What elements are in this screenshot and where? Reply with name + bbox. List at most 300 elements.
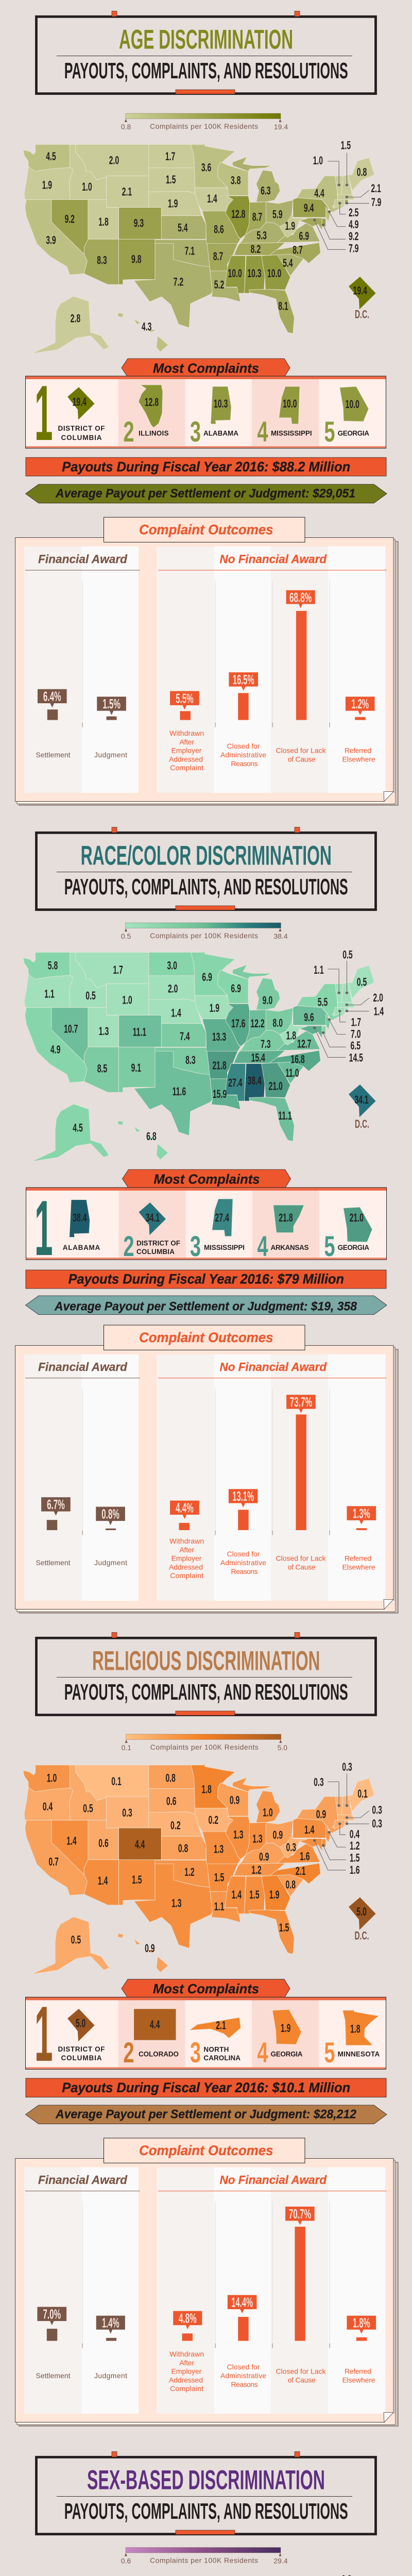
map: race complaints per state: 8.0 xyxy=(273,1016,283,1029)
legend: religious complaints scale: 5.0 xyxy=(278,1743,287,1752)
rank 1: alabama: ALABAMA xyxy=(63,1244,100,1251)
bar: lack of cause 73.7%: 73.7% xyxy=(290,1395,312,1410)
map: race complaints per state: 1.9 xyxy=(210,1002,219,1014)
bar: settlement 7.0% xyxy=(37,2307,66,2341)
panel: race complaint outcomes: Employer xyxy=(171,1554,202,1562)
map: age complaints per state: 8.7 xyxy=(252,210,262,223)
map: religious complaints per state: 0.9 xyxy=(230,1793,239,1807)
panel: religious complaint outcomes: Complaint xyxy=(170,2384,203,2393)
rank 2: colorado: COLORADO xyxy=(139,2050,179,2058)
panel: top five states for religious complaints xyxy=(26,1990,386,2078)
rank 1: district of columbia xyxy=(35,1990,105,2078)
map: age complaints per state: 5.3 xyxy=(256,229,267,242)
map: age complaints per state: 10.3 xyxy=(247,267,262,280)
map: race complaints per state: 12.7 xyxy=(297,1037,311,1050)
rank 5: georgia: GEORGIA xyxy=(338,1244,369,1251)
bar: judgment 1.5% xyxy=(97,697,126,720)
map: religious complaints per state: 4.4 xyxy=(135,1838,145,1851)
panel: age complaint outcomes: Employer xyxy=(171,746,202,754)
panel: race complaint outcomes: Settlement xyxy=(36,1558,71,1567)
bar: referred 1.8%: 1.8% xyxy=(353,2316,370,2331)
payout banner: religion: Payouts During Fiscal Year 2016: $10.1 Million xyxy=(62,2080,350,2095)
bar: administrative 14.4%: 14.4% xyxy=(231,2295,253,2310)
panel: race complaint outcomes: Judgment xyxy=(94,1558,127,1567)
rank 2: illinois xyxy=(123,385,169,448)
panel: race complaint outcomes: After xyxy=(179,1546,194,1554)
panel: religious complaint outcomes: Administrative xyxy=(220,2371,266,2380)
map: age complaints per state: 2.1 xyxy=(371,182,381,195)
rank 2: colorado: 4.4 xyxy=(150,2018,160,2031)
legend: sex complaints scale: Complaints per 100K Residents xyxy=(150,2556,258,2565)
rank 5: minnesota: MINNESOTA xyxy=(338,2050,380,2058)
panel: age complaint outcomes: Settlement xyxy=(36,751,71,759)
map: age complaints per state: 4.5 xyxy=(46,150,56,163)
map: religious complaints per state: 1.3 xyxy=(252,1832,263,1845)
map: race complaints per state: 21.0 xyxy=(269,1079,283,1092)
map: age complaints per state: 7.9 xyxy=(371,196,381,209)
legend: religious complaints scale: 0.1 xyxy=(122,1743,131,1752)
map: race complaints per state: 0.5 xyxy=(357,975,367,988)
map: race complaints per state: 13.3 xyxy=(212,1030,226,1043)
rank 4: georgia xyxy=(257,2009,303,2069)
panel: age complaint outcomes: Closed for Lack xyxy=(276,746,327,754)
panel: race complaint outcomes xyxy=(15,1325,398,1613)
map: religious complaints per state: 1.0 xyxy=(47,1771,57,1784)
map: age complaints per state: 1.8 xyxy=(98,215,109,228)
heading ribbon: most complaints xyxy=(122,359,290,377)
rank 2: district of columbia: DISTRICT OF xyxy=(136,1240,180,1247)
panel: race complaint outcomes: Closed for Lack xyxy=(276,1554,327,1562)
map: age complaints per state: 4.9 xyxy=(349,217,358,231)
map: race complaints per state: 11.0 xyxy=(285,1066,299,1079)
map: race complaints per state: 0.5 xyxy=(85,989,96,1002)
bar: referred 1.8% xyxy=(347,2316,376,2341)
rank 3: north carolina: 2.1 xyxy=(216,2019,226,2031)
rank 4: arkansas: ARKANSAS xyxy=(271,1244,309,1251)
map: religious complaints per state: 0.4 xyxy=(43,1800,53,1813)
bar: lack of cause 73.7% xyxy=(286,1395,316,1530)
panel: age complaint outcomes: After xyxy=(179,738,194,746)
map: age complaints per state: 1.0 xyxy=(82,180,92,193)
panel: religious complaint outcomes: Judgment xyxy=(94,2371,127,2380)
map: religious complaints per state: 1.6 xyxy=(300,1850,310,1862)
rank 1: district of columbia: COLUMBIA xyxy=(61,2054,102,2062)
map: race complaints per state: 1.0 xyxy=(122,993,132,1006)
panel: age complaint outcomes: Administrative xyxy=(220,751,266,759)
rank 2: illinois: 12.8 xyxy=(145,396,159,409)
map: religious complaints per state: 1.4 xyxy=(304,1823,315,1836)
map: age complaints per state: 9.4 xyxy=(304,201,314,214)
rank 3: north carolina: CAROLINA xyxy=(203,2054,241,2062)
map: religious complaints per state: 1.1 xyxy=(214,1900,224,1913)
map: religious complaints per state: 1.2 xyxy=(350,1839,360,1852)
panel: religious complaint outcomes: Elsewhere xyxy=(342,2376,375,2384)
map: religious complaints per state: 1.4 xyxy=(98,1874,108,1887)
map: race complaints per state: 15.4 xyxy=(251,1051,265,1064)
rank 3: mississippi: 3 xyxy=(190,1231,201,1263)
rank 3: alabama: ALABAMA xyxy=(203,430,238,437)
rank 2: colorado xyxy=(123,2009,179,2069)
rank 3: north carolina: 3 xyxy=(190,2037,201,2069)
rank 2: district of columbia: 2 xyxy=(123,1231,134,1263)
map: race complaints per state: 21.8 xyxy=(212,1059,227,1072)
map: religious complaints per state: 2.1 xyxy=(296,1865,305,1877)
legend: race complaints scale: 0.5 xyxy=(121,932,131,940)
average payout ribbon: race xyxy=(26,1296,387,1315)
map: religious complaints per state: D.C. xyxy=(355,1929,369,1942)
map: age complaints per state: 1.4 xyxy=(207,192,217,205)
heading ribbon: most complaints xyxy=(122,1979,290,1998)
map: race complaints per state: 7.0 xyxy=(351,1027,361,1040)
map: race complaints per state: 10.7 xyxy=(64,1022,78,1035)
map: race complaints per state: 9.0 xyxy=(263,994,272,1007)
panel: religious complaint outcomes: Addressed xyxy=(169,2376,203,2384)
rank 4: georgia: GEORGIA xyxy=(271,2050,303,2058)
bar: judgment 1.4% xyxy=(96,2316,125,2341)
map: religious complaints per state: 1.6 xyxy=(350,1863,360,1876)
map: race complaints per state: 6.9 xyxy=(231,982,241,995)
map: religious complaints per state: 1.2 xyxy=(184,1866,195,1878)
payout banner: race: Payouts During Fiscal Year 2016: $79 Million xyxy=(68,1272,344,1287)
map: age complaints per state: 5.2 xyxy=(214,278,224,291)
map: race complaints per state: 38.4 xyxy=(247,1074,262,1087)
bar: settlement 6.4% xyxy=(38,689,67,720)
payout banner: race xyxy=(26,1270,386,1289)
bar: lack of cause 70.7%: 70.7% xyxy=(289,2207,311,2222)
map: sex complaints per state xyxy=(23,2572,382,2576)
panel: race complaint outcomes: Referred xyxy=(345,1554,371,1562)
map: age complaints per state: 9.8 xyxy=(131,252,142,265)
map: religious complaints per state: 1.4 xyxy=(232,1888,242,1901)
map: religious complaints per state: 0.1 xyxy=(111,1775,122,1788)
map: race complaints per state: 0.5 xyxy=(342,948,353,961)
map: age complaints per state: 1.9 xyxy=(285,219,295,232)
map: age complaints per state: 6.3 xyxy=(261,184,271,197)
panel: race complaint outcomes: of Cause xyxy=(288,1563,316,1571)
map: race complaints per state: 1.3 xyxy=(99,1025,109,1038)
panel: age complaint outcomes: of Cause xyxy=(288,755,316,764)
panel: age complaint outcomes: No Financial Award xyxy=(220,552,327,566)
panel: race complaint outcomes: Complaint xyxy=(170,1571,203,1580)
map: race complaints per state: 17.6 xyxy=(231,1017,245,1030)
panel: religious complaint outcomes: No Financial Award xyxy=(220,2173,327,2187)
bar: administrative 14.4% xyxy=(228,2295,256,2341)
map: race complaints per state: 12.2 xyxy=(250,1017,265,1030)
map: religious complaints per state: 0.2 xyxy=(170,1819,181,1832)
rank 2: colorado: 2 xyxy=(123,2037,134,2069)
map: age complaints per state: 7.9 xyxy=(349,242,358,255)
panel: race complaint outcomes: Reasons xyxy=(231,1567,258,1575)
map: race complaints per state: 11.6 xyxy=(173,1085,186,1098)
map: age complaints per state: 8.2 xyxy=(251,243,261,256)
map: age complaints per state: 4.4 xyxy=(314,187,324,199)
rank 5: georgia: 21.0 xyxy=(350,1211,364,1224)
map: religious complaints per state: 0.9 xyxy=(316,1808,326,1821)
bar: withdrawn 5.5%: 5.5% xyxy=(176,691,194,706)
map: religious complaints per state: 0.3 xyxy=(122,1806,132,1819)
rank 4: mississippi: 4 xyxy=(257,416,268,448)
map: age complaints per state: 8.7 xyxy=(293,243,303,256)
map: age complaints per state: 5.4 xyxy=(178,221,188,234)
rank 1: alabama: 38.4 xyxy=(73,1211,87,1224)
map: religious complaints per state: 0.3 xyxy=(286,1841,296,1854)
map: religious complaints per state xyxy=(23,1760,382,1974)
map: age complaints per state xyxy=(23,139,381,354)
map: religious complaints per state: 1.5 xyxy=(249,1888,260,1901)
map: age complaints per state: 8.1 xyxy=(278,299,288,313)
panel: race complaint outcomes: Addressed xyxy=(169,1563,203,1571)
map: religious complaints per state: 0.5 xyxy=(83,1802,93,1815)
bar: settlement 6.7% xyxy=(41,1497,71,1530)
map: religious complaints per state: 1.0 xyxy=(263,1806,273,1819)
legend: religious complaints scale xyxy=(122,1734,287,1752)
bar: withdrawn 4.4% xyxy=(170,1500,199,1530)
legend: race complaints scale: Complaints per 100K Residents xyxy=(150,931,258,940)
map: age complaints per state: 7.2 xyxy=(174,275,183,288)
legend: religious complaints scale: Complaints per 100K Residents xyxy=(150,1743,259,1751)
map: religious complaints per state: 0.3 xyxy=(372,1817,382,1830)
panel: religious complaint outcomes xyxy=(15,2138,398,2426)
rank 4: georgia: 4 xyxy=(257,2037,268,2069)
rank 5: georgia xyxy=(324,1207,372,1263)
map: religious complaints per state: 0.3 xyxy=(314,1775,324,1788)
rank 1: district of columbia: 5.0 xyxy=(76,2016,85,2029)
title: age discrimination xyxy=(36,11,376,94)
rank 4: georgia: 1.9 xyxy=(281,2022,290,2035)
rank 2: district of columbia: COLUMBIA xyxy=(136,1248,175,1256)
title: race/color discrimination xyxy=(36,827,376,910)
bar: judgment 0.8%: 0.8% xyxy=(101,1506,119,1521)
map: race complaints per state: 9.6 xyxy=(304,1011,314,1024)
map: race complaints per state: 4.9 xyxy=(50,1043,60,1056)
bars: age outcome percentages xyxy=(38,590,375,720)
panel: religious complaint outcomes: Financial Award xyxy=(38,2173,128,2187)
map: age complaints per state: 1.0 xyxy=(313,154,323,167)
map: age complaints per state: 2.8 xyxy=(71,312,80,325)
map: age complaints per state: 2.5 xyxy=(349,206,358,219)
bar: referred 1.2%: 1.2% xyxy=(351,697,369,711)
panel: age complaint outcomes: Reasons xyxy=(231,759,258,768)
bar: withdrawn 5.5% xyxy=(170,691,199,720)
panel: age complaint outcomes: Financial Award xyxy=(38,552,128,566)
map: race complaints per state: 14.5 xyxy=(349,1051,363,1064)
panel: race complaint outcomes: Withdrawn xyxy=(169,1537,204,1545)
map: religious complaints per state: 1.5 xyxy=(132,1873,142,1886)
map: age complaints per state: 9.2 xyxy=(64,212,75,225)
panel: age complaint outcomes: Withdrawn xyxy=(169,729,204,737)
map: religious complaints per state: 1.4 xyxy=(66,1834,77,1848)
bar: judgment 0.8% xyxy=(96,1506,125,1530)
panel: race complaint outcomes: Administrative xyxy=(220,1558,266,1567)
map: race complaints per state: 8.5 xyxy=(97,1062,107,1075)
map: religious complaints per state: 0.5 xyxy=(71,1933,81,1946)
panel: religious complaint outcomes: Referred xyxy=(345,2367,371,2375)
map: age complaints per state: 9.3 xyxy=(134,216,144,229)
map: religious complaints per state: 0.9 xyxy=(145,1941,155,1955)
bars: religious outcome percentages xyxy=(37,2207,376,2341)
map: race complaints per state: 9.1 xyxy=(131,1061,141,1074)
map: religious complaints per state: 0.3 xyxy=(372,1803,382,1816)
legend: race complaints scale xyxy=(121,923,288,940)
map: age complaints per state: 7.1 xyxy=(185,244,195,257)
map: race complaints per state: 7.4 xyxy=(180,1029,190,1043)
map: race complaints per state: 2.0 xyxy=(373,991,383,1004)
map: age complaints per state: 5.9 xyxy=(272,208,283,221)
map: race complaints per state: 6.8 xyxy=(146,1130,157,1143)
panel: race complaint outcomes: Complaint Outcomes xyxy=(139,1330,273,1345)
map: race complaints per state: 5.5 xyxy=(318,995,328,1009)
bar: referred 1.3% xyxy=(347,1506,376,1530)
map: race complaints per state: 15.9 xyxy=(213,1087,227,1100)
map: religious complaints per state: 0.4 xyxy=(350,1827,360,1840)
map: religious complaints per state: 5.0 xyxy=(356,1905,367,1918)
rank 2: illinois: ILLINOIS xyxy=(139,430,169,437)
panel: age complaint outcomes: Complaint xyxy=(170,764,203,772)
bar: administrative 16.5% xyxy=(229,672,258,720)
map: religious complaints per state: 0.6 xyxy=(98,1837,109,1850)
bar: referred 1.3%: 1.3% xyxy=(353,1506,370,1521)
panel: race complaint outcomes: Elsewhere xyxy=(342,1563,375,1571)
map: race complaints per state: 2.0 xyxy=(168,982,178,995)
rank 5: georgia: GEORGIA xyxy=(338,430,369,437)
legend: age complaints scale: 19.4 xyxy=(274,123,288,131)
rank 3: mississippi: 27.4 xyxy=(215,1211,229,1224)
legend: age complaints scale: 0.8 xyxy=(121,123,131,131)
map: age complaints per state: 19.4 xyxy=(353,284,367,297)
rank 3: north carolina: NORTH xyxy=(203,2046,229,2054)
bar: lack of cause 68.8%: 68.8% xyxy=(289,590,312,605)
rank 1: district of columbia: COLUMBIA xyxy=(61,434,102,442)
panel: age complaint outcomes: Addressed xyxy=(169,755,203,763)
legend: race complaints scale: 38.4 xyxy=(273,932,288,940)
panel: religious complaint outcomes: Reasons xyxy=(231,2380,258,2388)
panel: religious complaint outcomes: Complaint Outcomes xyxy=(139,2143,273,2158)
map: race complaints per state xyxy=(23,948,384,1162)
panel: age complaint outcomes xyxy=(15,517,398,805)
map: religious complaints per state: 0.9 xyxy=(273,1828,283,1841)
panel: race complaint outcomes: No Financial Award xyxy=(220,1360,327,1374)
bar: referred 1.2% xyxy=(346,697,375,720)
heading ribbon: most complaints: Most Complaints xyxy=(153,1171,260,1187)
map: age complaints per state: 8.6 xyxy=(214,223,224,235)
rank 5: georgia: 10.0 xyxy=(346,398,359,411)
map: age complaints per state: 3.8 xyxy=(231,174,241,187)
bar: lack of cause 68.8% xyxy=(286,590,315,720)
map: religious complaints per state: 0.8 xyxy=(165,1771,176,1784)
panel: age complaint outcomes: Closed for xyxy=(227,742,260,750)
map: religious complaints per state: 1.5 xyxy=(279,1921,289,1934)
average payout ribbon: religion: Average Payout per Settlement or Judgment: $28,212 xyxy=(55,2108,357,2122)
map: age complaints per state: 8.3 xyxy=(97,253,107,266)
rank 1: alabama xyxy=(35,1184,100,1272)
map: age complaints per state: 3.9 xyxy=(46,233,56,246)
map: race complaints per state: 11.1 xyxy=(133,1025,146,1038)
map: age complaints per state: 3.6 xyxy=(201,161,211,174)
bar: judgment 1.5%: 1.5% xyxy=(102,697,121,711)
map: religious complaints per state: 1.3 xyxy=(214,1842,224,1855)
rank 1: alabama: 1 xyxy=(35,1184,53,1272)
map: age complaints per state: 1.5 xyxy=(166,173,176,186)
title: sex-based discrimination xyxy=(36,2451,376,2535)
heading ribbon: most complaints xyxy=(123,1170,290,1188)
panel: top five states for race complaints xyxy=(26,1184,386,1272)
rank 1: district of columbia xyxy=(35,369,105,457)
rank 2: illinois: 2 xyxy=(123,416,134,448)
map: race complaints per state: 7.3 xyxy=(261,1038,271,1050)
heading ribbon: most complaints: Most Complaints xyxy=(153,360,259,376)
bar: withdrawn 4.8%: 4.8% xyxy=(179,2311,197,2326)
rank 3: mississippi: MISSISSIPPI xyxy=(204,1244,245,1251)
map: religious complaints per state: 1.5 xyxy=(214,1871,224,1884)
map: age complaints per state: 1.5 xyxy=(341,139,351,151)
map: age complaints per state: 1.9 xyxy=(168,197,178,210)
panel: race complaint outcomes: Financial Award xyxy=(38,1360,128,1374)
bar: withdrawn 4.4%: 4.4% xyxy=(176,1500,194,1515)
map: race complaints per state: 1.8 xyxy=(286,1029,296,1042)
map: religious complaints per state: 1.3 xyxy=(233,1828,244,1841)
rank 4: arkansas: 4 xyxy=(257,1231,268,1263)
map: religious complaints per state: 0.1 xyxy=(357,1787,368,1800)
panel: age complaint outcomes: Referred xyxy=(345,746,371,754)
rank 5: minnesota: 1.8 xyxy=(350,2022,360,2035)
legend: age complaints scale: Complaints per 100K Residents xyxy=(150,122,258,130)
map: age complaints per state: 2.1 xyxy=(122,185,132,198)
map: age complaints per state: 9.2 xyxy=(349,230,358,243)
panel: religious complaint outcomes: of Cause xyxy=(288,2376,316,2384)
rank 5: minnesota: 5 xyxy=(324,2037,335,2069)
legend: sex complaints scale xyxy=(121,2547,288,2565)
bar: administrative 13.1%: 13.1% xyxy=(232,1489,254,1504)
map: religious complaints per state: 0.7 xyxy=(48,1855,59,1868)
map: age complaints per state: 0.8 xyxy=(357,165,367,178)
map: race complaints per state: 27.4 xyxy=(228,1076,243,1089)
panel: religious complaint outcomes: Employer xyxy=(171,2367,202,2375)
average payout ribbon: race: Average Payout per Settlement or Judgment: $19, 358 xyxy=(54,1299,357,1313)
rank 1: district of columbia: DISTRICT OF xyxy=(58,425,105,432)
map: age complaints per state: 6.9 xyxy=(299,229,309,242)
rank 4: mississippi xyxy=(257,386,312,448)
rank 4: mississippi: 10.0 xyxy=(283,397,297,410)
map: religious complaints per state: 1.9 xyxy=(269,1888,279,1901)
title: religious discrimination xyxy=(36,1632,376,1716)
map: religious complaints per state: 1.8 xyxy=(201,1783,212,1795)
legend: age complaints scale xyxy=(121,113,288,131)
map: religious complaints per state: 1.2 xyxy=(251,1863,262,1876)
panel: religious complaint outcomes: Closed for xyxy=(227,2363,260,2371)
rank 4: arkansas: 21.8 xyxy=(279,1211,293,1224)
legend: sex complaints scale: 0.6 xyxy=(121,2556,131,2565)
map: religious complaints per state: 0.8 xyxy=(178,1842,188,1855)
rank 1: district of columbia: 19.4 xyxy=(72,395,87,408)
rank 1: district of columbia: 1 xyxy=(35,369,53,457)
map: race complaints per state: 6.9 xyxy=(202,971,212,984)
map: race complaints per state: 1.1 xyxy=(44,987,55,1000)
bar: judgment 1.4%: 1.4% xyxy=(102,2316,119,2331)
map: age complaints per state: 10.0 xyxy=(267,267,281,280)
average payout ribbon: age xyxy=(26,484,387,503)
rank 4: mississippi: MISSISSIPPI xyxy=(271,430,312,437)
panel: age complaint outcomes: Judgment xyxy=(94,751,127,759)
rank 3: alabama xyxy=(190,386,238,448)
panel: religious complaint outcomes: Closed for Lack xyxy=(276,2367,327,2375)
map: race complaints per state: 16.8 xyxy=(290,1053,305,1065)
legend: sex complaints scale: 29.4 xyxy=(273,2556,288,2565)
bar: administrative 13.1% xyxy=(229,1489,258,1530)
map: race complaints per state: 3.0 xyxy=(167,959,177,972)
rank 5: georgia xyxy=(324,386,369,448)
rank 3: mississippi xyxy=(190,1199,245,1263)
map: race complaints per state: 6.5 xyxy=(351,1039,360,1052)
